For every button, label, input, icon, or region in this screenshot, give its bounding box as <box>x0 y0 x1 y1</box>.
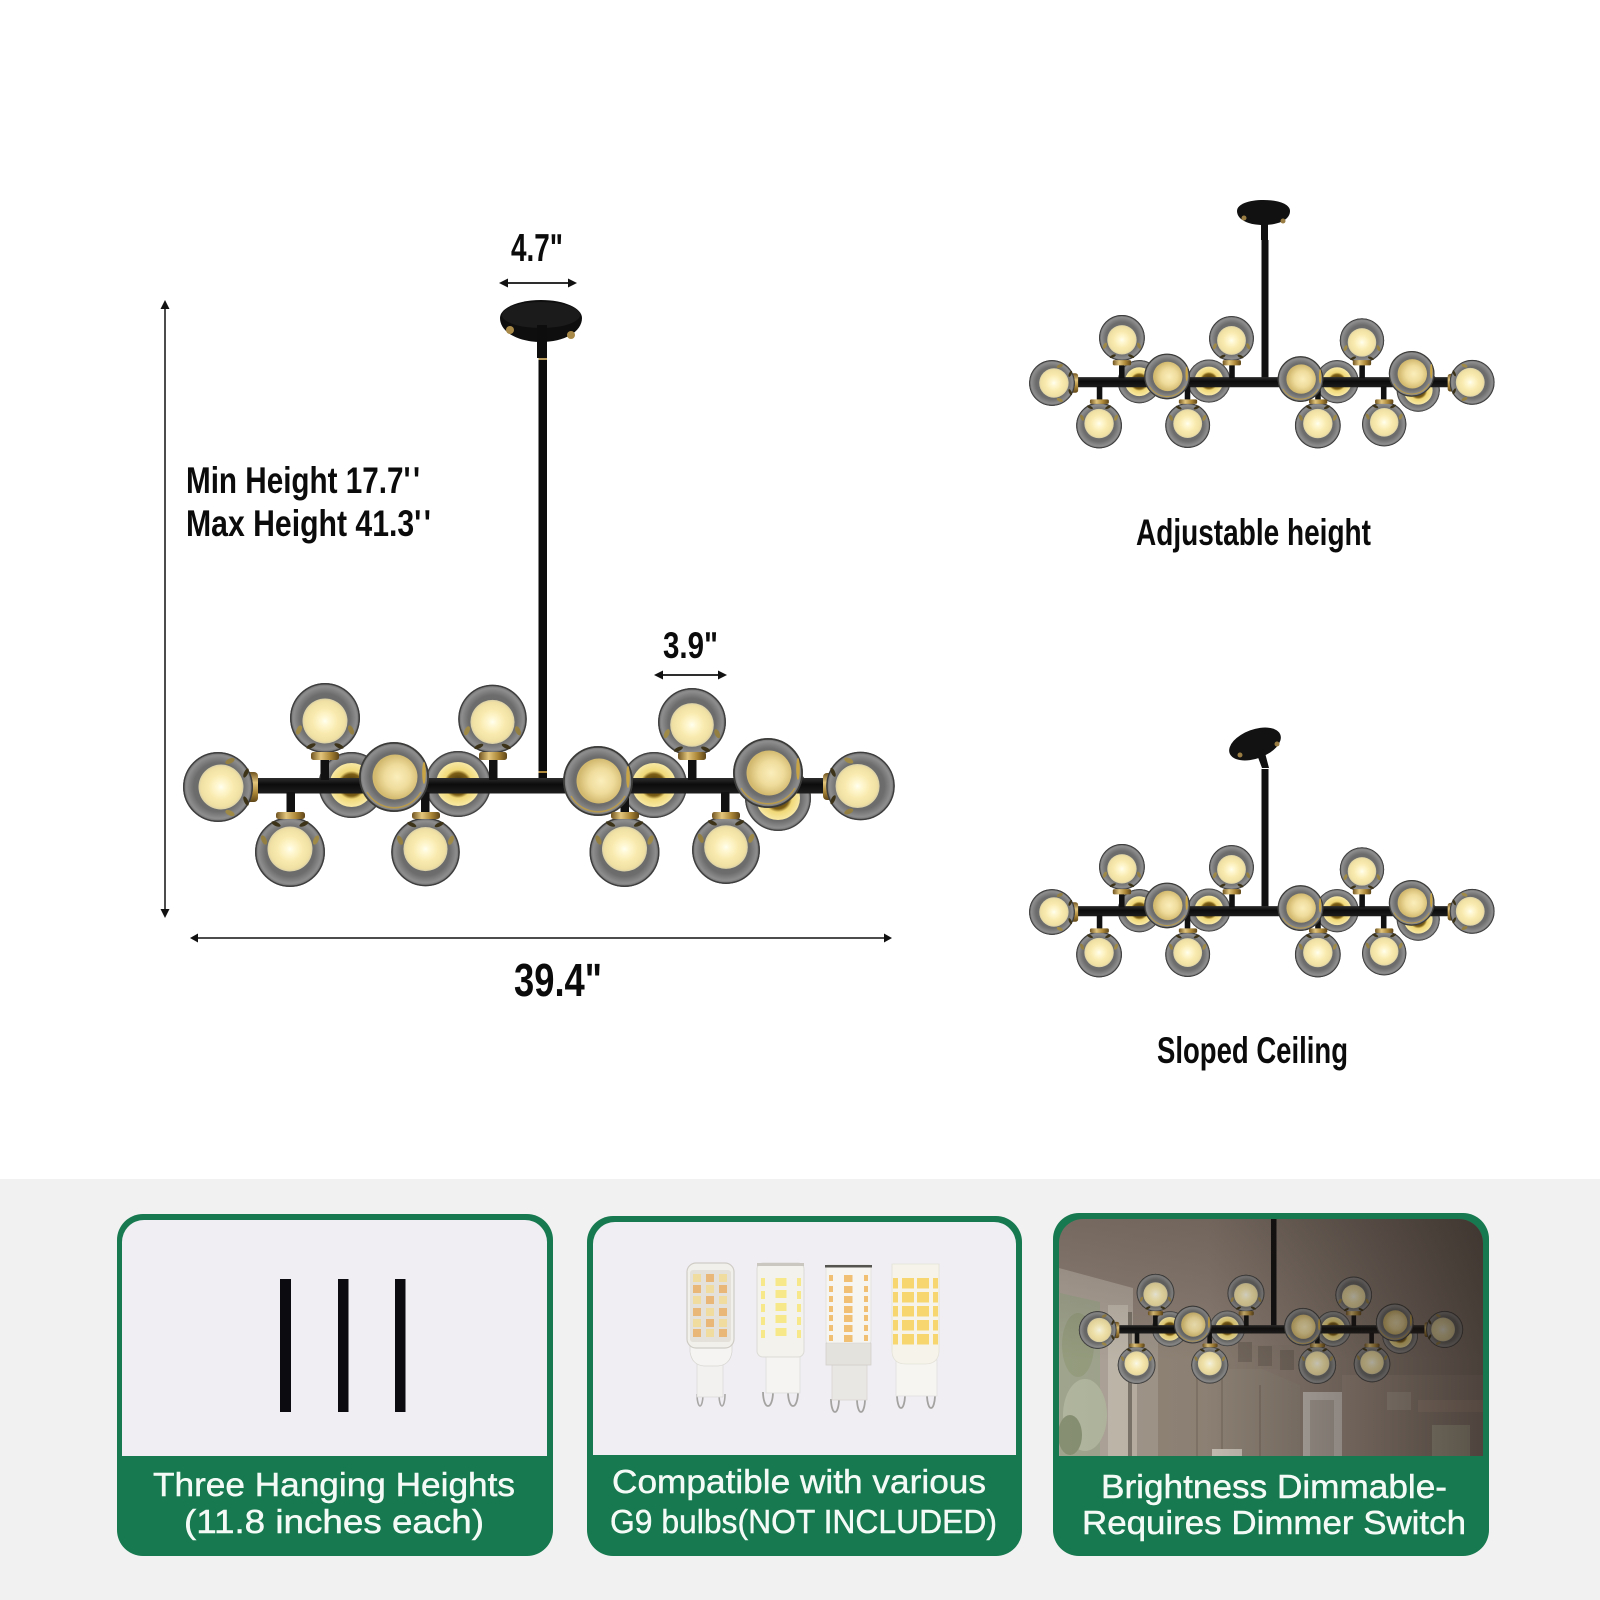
chandelier: adjustable height <box>1029 200 1495 448</box>
dimension arrow: globe diameter <box>654 670 727 680</box>
panel caption: Compatible with various <box>612 1463 986 1500</box>
caption: sloped ceiling: Sloped Ceiling <box>1157 1030 1348 1071</box>
label: globe diameter: 3.9" <box>663 625 718 666</box>
panel image area <box>122 1220 547 1456</box>
panel: brightness dimmable <box>1053 1213 1489 1556</box>
panel: compatible bulbs <box>587 1216 1022 1556</box>
panel caption <box>610 1463 997 1540</box>
dimension arrow: canopy width <box>499 278 577 288</box>
panel caption <box>153 1466 515 1540</box>
icon: bulb 2 <box>757 1263 804 1406</box>
chandelier in room <box>1059 1219 1483 1456</box>
panel caption: Three Hanging Heights <box>153 1466 515 1503</box>
room photo <box>1058 1219 1483 1456</box>
panel caption: G9 bulbs(NOT INCLUDED) <box>610 1503 997 1540</box>
panel: three hanging heights <box>117 1214 553 1556</box>
main chandelier with dimensions <box>183 300 895 887</box>
label: total width: 39.4" <box>514 954 602 1006</box>
panel caption: Requires Dimmer Switch <box>1082 1504 1466 1541</box>
icon: three rods <box>280 1279 406 1412</box>
label: canopy width: 4.7" <box>511 227 563 270</box>
panel caption: Brightness Dimmable- <box>1101 1468 1447 1505</box>
bottom band <box>0 1179 1600 1600</box>
panel image area <box>593 1222 1016 1455</box>
icon: bulb 4 <box>892 1264 939 1408</box>
label: height range: Max Height 41.3'' <box>186 503 431 544</box>
chandelier: sloped ceiling <box>1029 721 1495 977</box>
dimension arrow: total height <box>160 300 170 918</box>
label: height range: Min Height 17.7'' <box>186 460 420 501</box>
arm with sixteen glass globes <box>183 683 895 887</box>
dimension arrow: total width <box>190 934 892 942</box>
caption: adjustable height: Adjustable height <box>1136 512 1371 553</box>
icon: bulb 3 <box>825 1265 872 1412</box>
ceiling canopy <box>500 300 582 342</box>
panel caption <box>1082 1468 1466 1541</box>
hanging stem <box>537 325 547 778</box>
panel caption: (11.8 inches each) <box>184 1503 484 1540</box>
label: height range <box>186 460 431 544</box>
icon: bulb 1 <box>687 1263 734 1406</box>
